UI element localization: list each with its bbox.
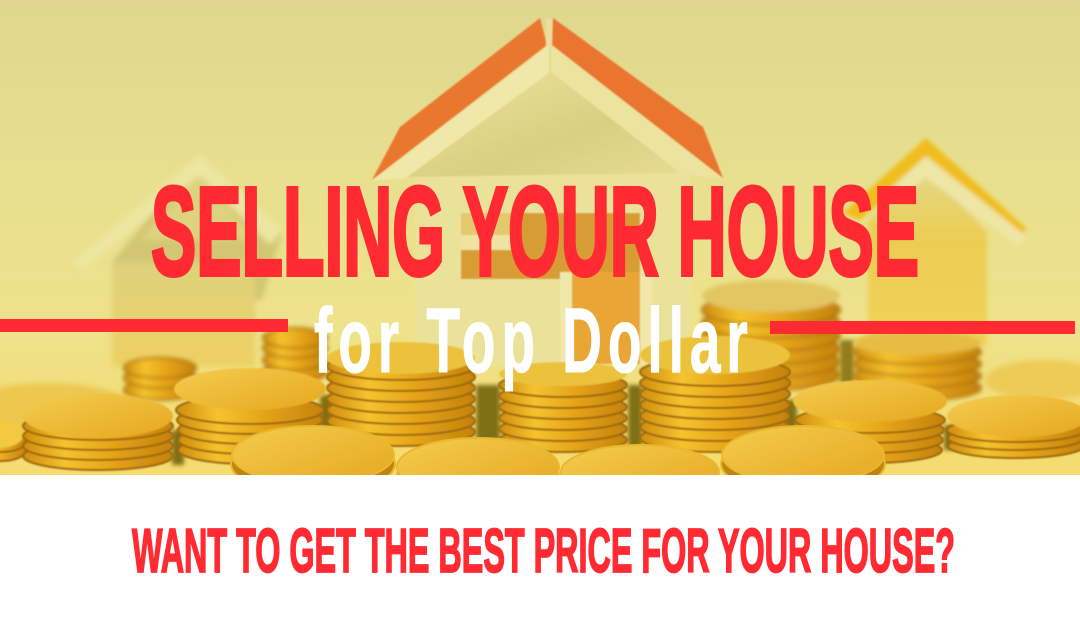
door xyxy=(572,272,640,364)
ground pale coins xyxy=(0,358,1080,432)
coin stack: back right xyxy=(124,280,981,400)
stack far left xyxy=(0,420,26,461)
coin stacks: middle row xyxy=(327,336,790,452)
right red rule xyxy=(770,321,1075,334)
stack 1 xyxy=(327,342,475,446)
left red rule xyxy=(0,319,288,332)
icon: right model house xyxy=(843,138,1026,346)
coin stacks: front row xyxy=(230,425,886,475)
window xyxy=(461,213,640,279)
subtitle: for Top Dollar: for Top Dollar xyxy=(314,290,748,393)
stack left xyxy=(23,394,173,470)
stack 2 xyxy=(499,362,627,452)
dark gaps between stacks xyxy=(172,340,954,465)
icon: left model house xyxy=(72,155,283,366)
stack centre right xyxy=(793,380,947,463)
coin stacks: side row xyxy=(0,368,1080,470)
icon: main model house xyxy=(372,18,723,366)
stack far right xyxy=(947,395,1080,458)
stack 3 xyxy=(640,336,790,452)
stack centre left xyxy=(174,368,326,464)
white lower band xyxy=(0,475,1080,627)
coin stacks xyxy=(0,278,1080,475)
